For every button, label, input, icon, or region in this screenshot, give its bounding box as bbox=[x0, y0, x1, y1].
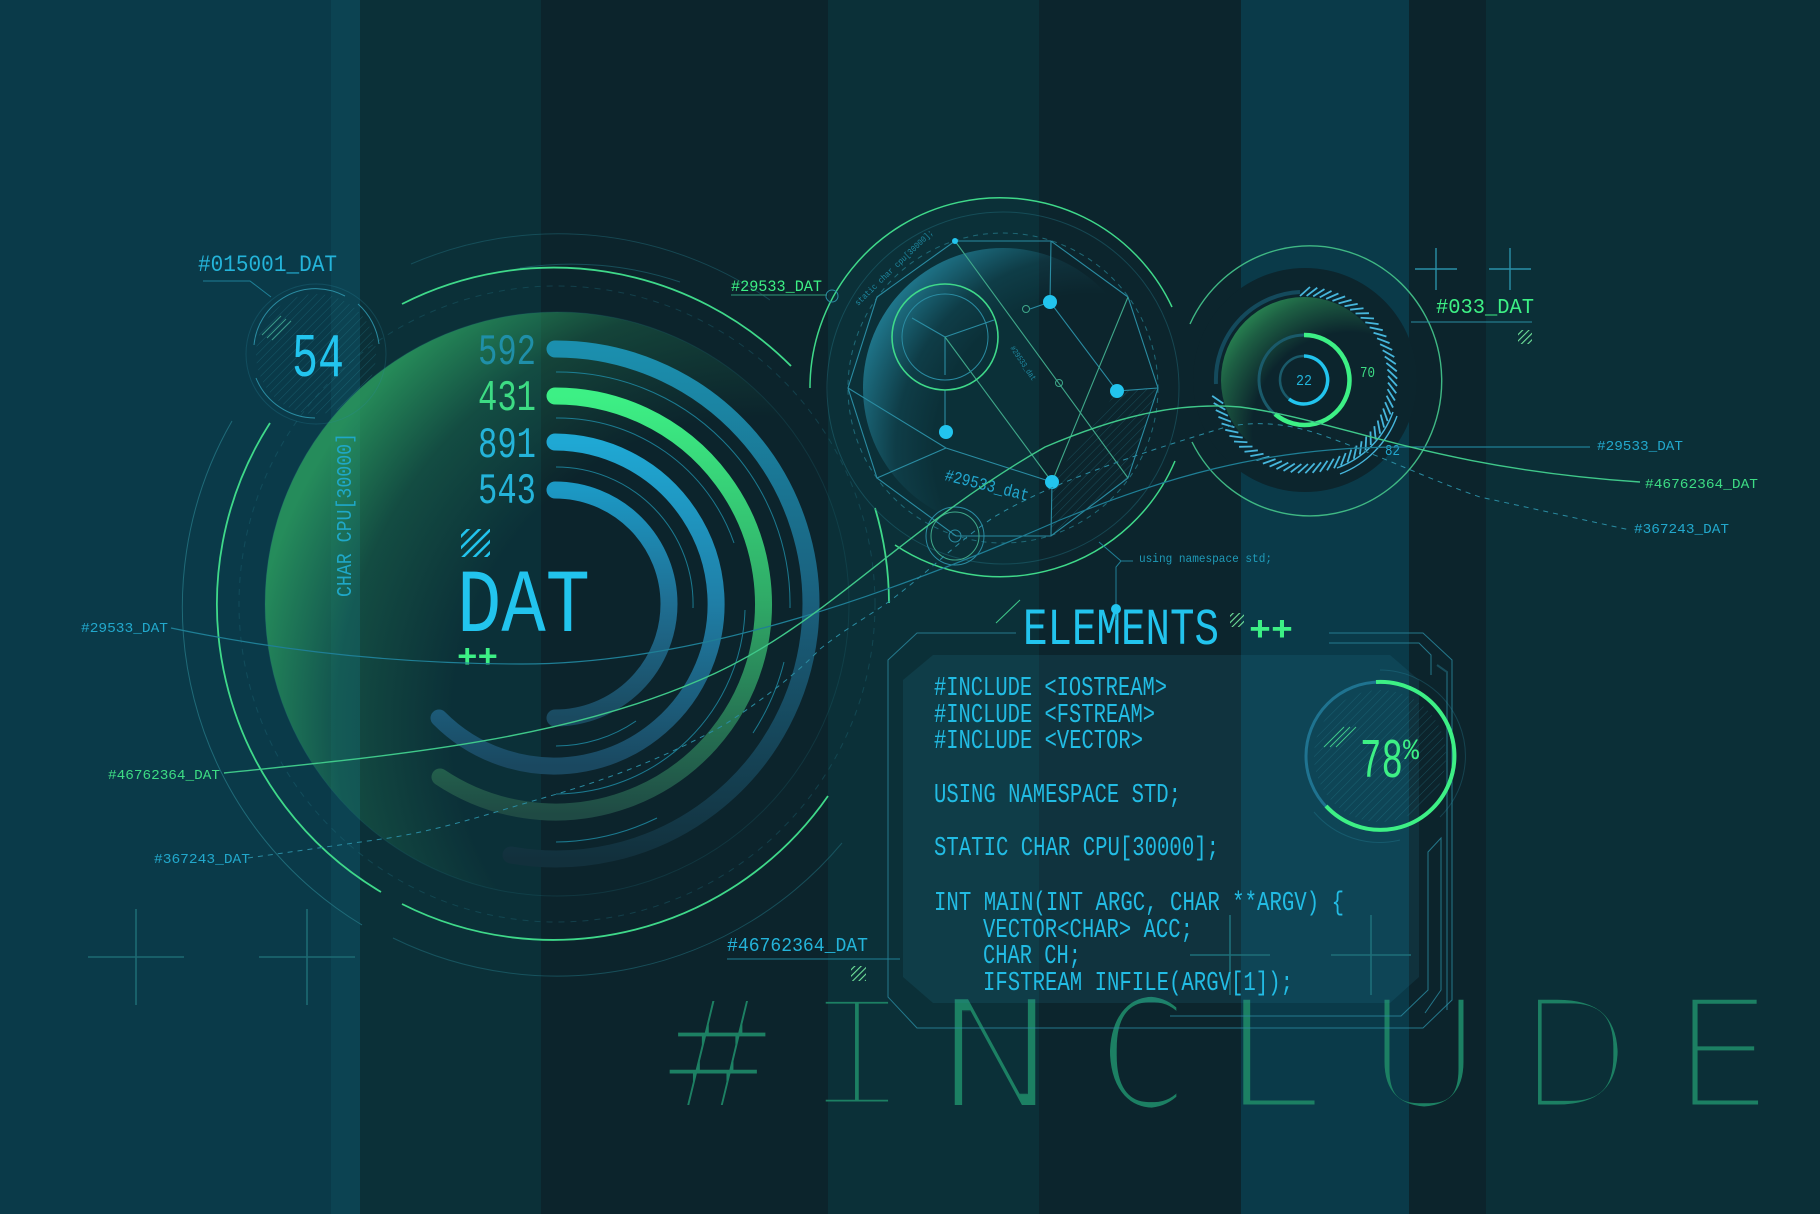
label: top #29533_DAT: #29533_DAT bbox=[731, 278, 822, 296]
plus signs: ++ bbox=[457, 640, 498, 677]
watermark heading: #INCLUDE: # bbox=[654, 964, 781, 1146]
left labels: #367243_DAT bbox=[154, 852, 250, 868]
tick ring bbox=[1212, 287, 1397, 473]
right labels: #46762364_DAT bbox=[1645, 477, 1758, 493]
hatched facet bbox=[1051, 388, 1158, 536]
curve: blue connector bbox=[171, 447, 1590, 664]
gauge values bbox=[1296, 365, 1400, 460]
code block: #INCLUDE <IOSTREAM> bbox=[934, 674, 1167, 704]
watermark heading: #INCLUDE: D bbox=[1518, 964, 1632, 1146]
small node rings bbox=[1022, 306, 1062, 386]
dark disc bbox=[1193, 268, 1417, 492]
percent sign: % bbox=[1403, 735, 1420, 769]
label: bottom #46762364_DAT: #46762364_DAT bbox=[727, 935, 868, 957]
caption: using namespace std: using namespace std; bbox=[1139, 552, 1272, 566]
green arcs bbox=[810, 198, 1175, 577]
accent lines bbox=[1324, 727, 1356, 747]
long slashes bbox=[1337, 412, 1397, 474]
code block bbox=[934, 674, 1344, 999]
hatched disc bbox=[256, 294, 376, 414]
title: ELEMENTS bbox=[1023, 601, 1219, 660]
arc code label: static char cpu[30000]; bbox=[853, 228, 936, 308]
value labels bbox=[478, 328, 536, 517]
watermark heading: #INCLUDE: E bbox=[1671, 964, 1774, 1146]
code block: STATIC CHAR CPU[30000]; bbox=[934, 834, 1219, 864]
outer rings bbox=[1306, 670, 1465, 842]
gauge values: 22 bbox=[1296, 373, 1312, 390]
code block: USING NAMESPACE STD; bbox=[934, 781, 1181, 811]
54 value: 54 bbox=[292, 324, 344, 395]
panel: polygon sphere bbox=[810, 198, 1179, 577]
rings bbox=[827, 212, 1179, 564]
sphere bbox=[863, 248, 1143, 528]
panel frame bbox=[888, 633, 1452, 1028]
DAT label: DAT bbox=[457, 557, 590, 659]
small hatch bbox=[262, 316, 291, 340]
code block: #INCLUDE <FSTREAM> bbox=[934, 701, 1155, 731]
watermark heading: #INCLUDE bbox=[654, 964, 1774, 1158]
plus signs: ++ bbox=[1249, 613, 1293, 651]
watermark heading: #INCLUDE: C bbox=[1100, 964, 1186, 1146]
left labels bbox=[81, 621, 250, 868]
right labels: #29533_DAT bbox=[1597, 439, 1683, 455]
label: #015001_DAT: #015001_DAT bbox=[198, 252, 337, 278]
value labels: 891 bbox=[478, 421, 536, 471]
thin inner arcs bbox=[556, 372, 790, 842]
label: #015001_DAT bbox=[198, 252, 337, 297]
value: 78 bbox=[1360, 730, 1403, 794]
watermark heading: #INCLUDE: U bbox=[1365, 964, 1483, 1146]
watermark heading: #INCLUDE: N bbox=[935, 964, 1055, 1146]
curve: green connector bbox=[224, 406, 1640, 773]
value labels: 592 bbox=[478, 328, 536, 378]
curve: dashed connector bbox=[248, 424, 1630, 858]
value labels: 543 bbox=[478, 467, 536, 517]
label: top #29533_DAT bbox=[731, 278, 838, 302]
slanted accent bbox=[996, 600, 1020, 623]
polygon bbox=[848, 241, 1158, 536]
panel: code bbox=[888, 542, 1452, 1028]
code block: CHAR CH; bbox=[983, 942, 1081, 972]
hatch disc bbox=[1314, 690, 1446, 822]
code block: INT MAIN(INT ARGC, CHAR **ARGV) { bbox=[934, 889, 1344, 919]
bright green outer arcs bbox=[217, 268, 889, 940]
small rotated label: #29533_dat bbox=[1008, 345, 1037, 383]
value labels: 431 bbox=[478, 374, 536, 424]
rotated labels: #29533_dat bbox=[943, 467, 1031, 507]
thin outer rings bbox=[182, 234, 875, 976]
label: #033_DAT: #033_DAT bbox=[1436, 297, 1534, 320]
data arcs bbox=[439, 349, 811, 859]
gauge values: 70 bbox=[1360, 365, 1375, 382]
panel: main radial gauge bbox=[182, 234, 889, 976]
code block: IFSTREAM INFILE(ARGV[1]); bbox=[983, 969, 1293, 999]
icon: hatch bbox=[1230, 613, 1244, 627]
wireframe lines bbox=[848, 241, 1158, 536]
nodes bbox=[939, 238, 1124, 489]
right labels: #367243_DAT bbox=[1634, 522, 1729, 538]
decorative crosses bbox=[88, 909, 1411, 1005]
target rings bbox=[926, 507, 984, 565]
sphere bbox=[1221, 297, 1387, 463]
code block: #INCLUDE <VECTOR> bbox=[934, 727, 1143, 757]
panel: 54 badge bbox=[246, 284, 386, 424]
left labels: #46762364_DAT bbox=[108, 768, 220, 784]
gauge values: 82 bbox=[1385, 443, 1400, 460]
inner circle bbox=[892, 284, 998, 390]
icon: hatch square bbox=[461, 529, 490, 557]
label: bottom #46762364_DAT bbox=[727, 935, 900, 981]
watermark heading: #INCLUDE: L bbox=[1220, 964, 1321, 1146]
gauge: 78 percent bbox=[1306, 670, 1465, 842]
rotated label: CHAR CPU[30000] bbox=[335, 433, 358, 597]
icon: top right crosses bbox=[1415, 248, 1531, 290]
code block: VECTOR<CHAR> ACC; bbox=[983, 916, 1193, 946]
panel fill bbox=[903, 655, 1419, 1003]
watermark heading: #INCLUDE: I bbox=[800, 968, 914, 1158]
connector with dot bbox=[1099, 542, 1133, 620]
left labels: #29533_DAT bbox=[81, 621, 168, 637]
label: #033_DAT bbox=[1411, 297, 1534, 344]
outer green ring bbox=[1190, 246, 1442, 516]
badge rings bbox=[246, 284, 386, 424]
green and blue rings bbox=[1259, 335, 1349, 425]
dim arc bbox=[1216, 292, 1300, 384]
panel: small gauge bbox=[1190, 246, 1442, 516]
right labels bbox=[1597, 439, 1758, 538]
gauge sphere bbox=[265, 312, 849, 896]
